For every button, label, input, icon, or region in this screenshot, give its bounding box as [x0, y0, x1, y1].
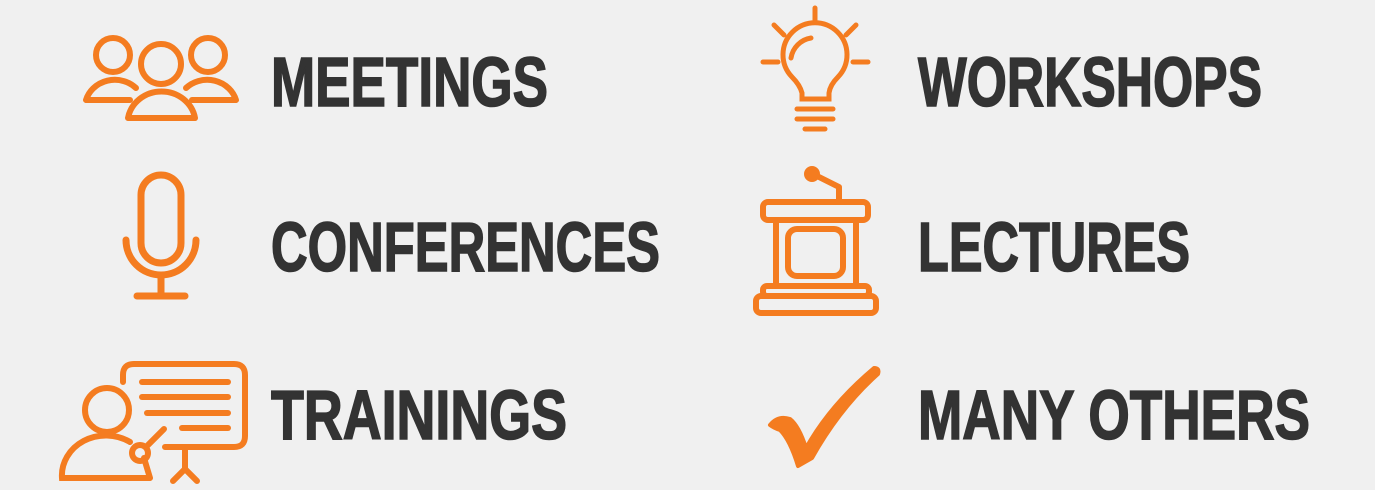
label: workshops: WORKSHOPS — [918, 43, 1262, 121]
icon: meetings people — [86, 38, 236, 118]
label: lectures: LECTURES — [918, 208, 1190, 286]
label: conferences: CONFERENCES — [271, 208, 660, 286]
icon: microphone — [126, 175, 196, 296]
label: meetings: MEETINGS — [271, 43, 548, 121]
label: trainings: TRAININGS — [271, 376, 567, 454]
icon: trainings presenter — [62, 364, 245, 481]
icon: check mark — [770, 368, 878, 466]
icon: lectern — [756, 169, 876, 313]
icon: light bulb — [763, 8, 868, 129]
